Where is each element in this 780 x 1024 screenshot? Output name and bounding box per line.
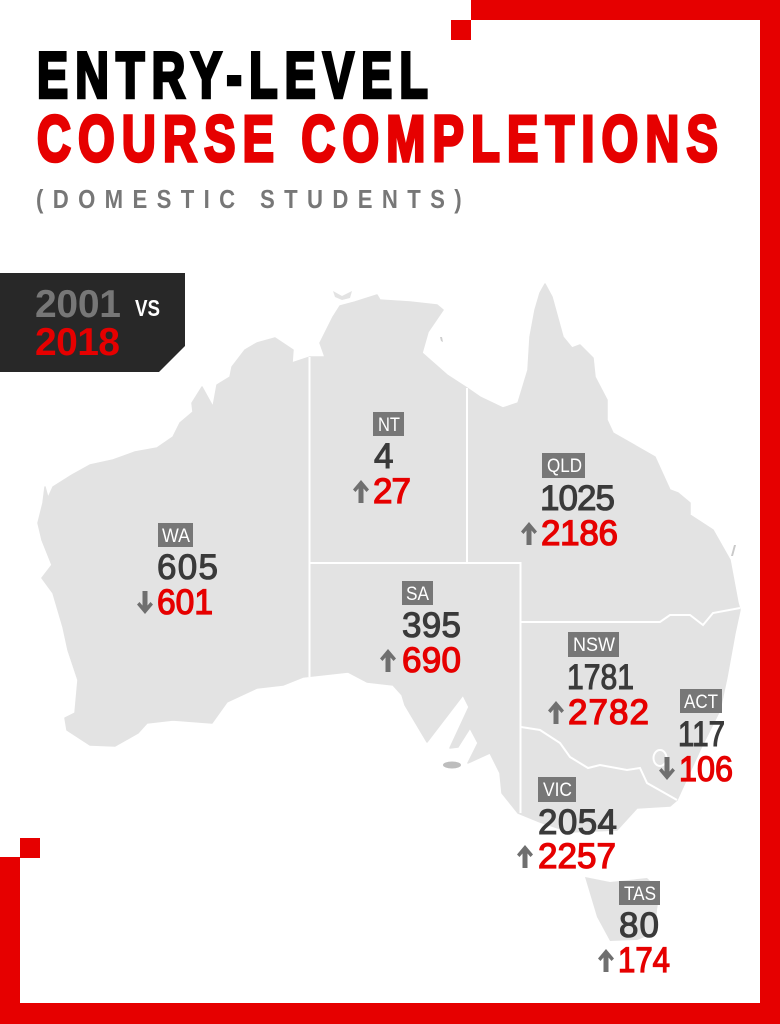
TAS 2018 value: 174 [618,941,670,980]
NSW 2018 value: 2782 [568,693,649,732]
QLD up arrow [521,522,537,545]
VIC figures [517,777,617,876]
ACT tag: ACT [684,692,718,713]
title line: entry-level: ENTRY-LEVEL [37,38,435,112]
subtitle: (DOMESTIC STUDENTS) [36,184,471,214]
WA down arrow [137,591,153,614]
WA tag: WA [162,526,190,547]
NSW tag: NSW [573,635,615,656]
NSW figures [548,632,649,732]
tasmania [585,877,660,941]
QLD tag: QLD [547,456,582,477]
TAS 2001 value: 80 [619,906,659,945]
SA up arrow [380,649,396,672]
tiwi islands [333,291,352,300]
TAS figures [598,881,670,980]
legend box [0,273,185,372]
QLD figures [521,453,618,553]
ACT 2018 value: 106 [679,750,733,789]
VIC 2018 value: 2257 [538,837,616,876]
legend: 2001: 2001 [35,283,121,326]
title [36,38,725,214]
legend: 2018: 2018 [35,321,120,364]
legend: vs: VS [135,295,160,321]
state borders [310,357,740,813]
ACT down arrow [659,757,675,780]
ACT figures [659,689,733,789]
NT 2001 value: 4 [374,437,393,476]
NT figures [353,412,411,511]
map of Australia [38,284,740,941]
groote eylandt [440,337,443,342]
WA 2001 value: 605 [157,548,218,587]
NSW up arrow [548,701,564,724]
QLD 2001 value: 1025 [540,479,615,518]
SA 2001 value: 395 [402,606,461,645]
NT tag: NT [378,415,400,436]
QLD 2018 value: 2186 [541,514,618,553]
kangaroo island [443,762,461,768]
NT up arrow [353,480,369,503]
WA figures [137,523,218,622]
VIC tag: VIC [543,780,572,801]
VIC up arrow [517,845,533,868]
fraser island [731,545,736,556]
ACT 2001 value: 117 [678,715,725,754]
SA figures [380,581,461,680]
TAS up arrow [598,949,614,972]
SA tag: SA [406,584,429,605]
SA 2018 value: 690 [402,641,461,680]
mainland [38,284,740,832]
WA 2018 value: 601 [157,583,213,622]
TAS tag: TAS [624,884,656,905]
NT 2018 value: 27 [373,472,411,511]
VIC 2001 value: 2054 [538,803,617,842]
NSW 2001 value: 1781 [567,658,634,697]
